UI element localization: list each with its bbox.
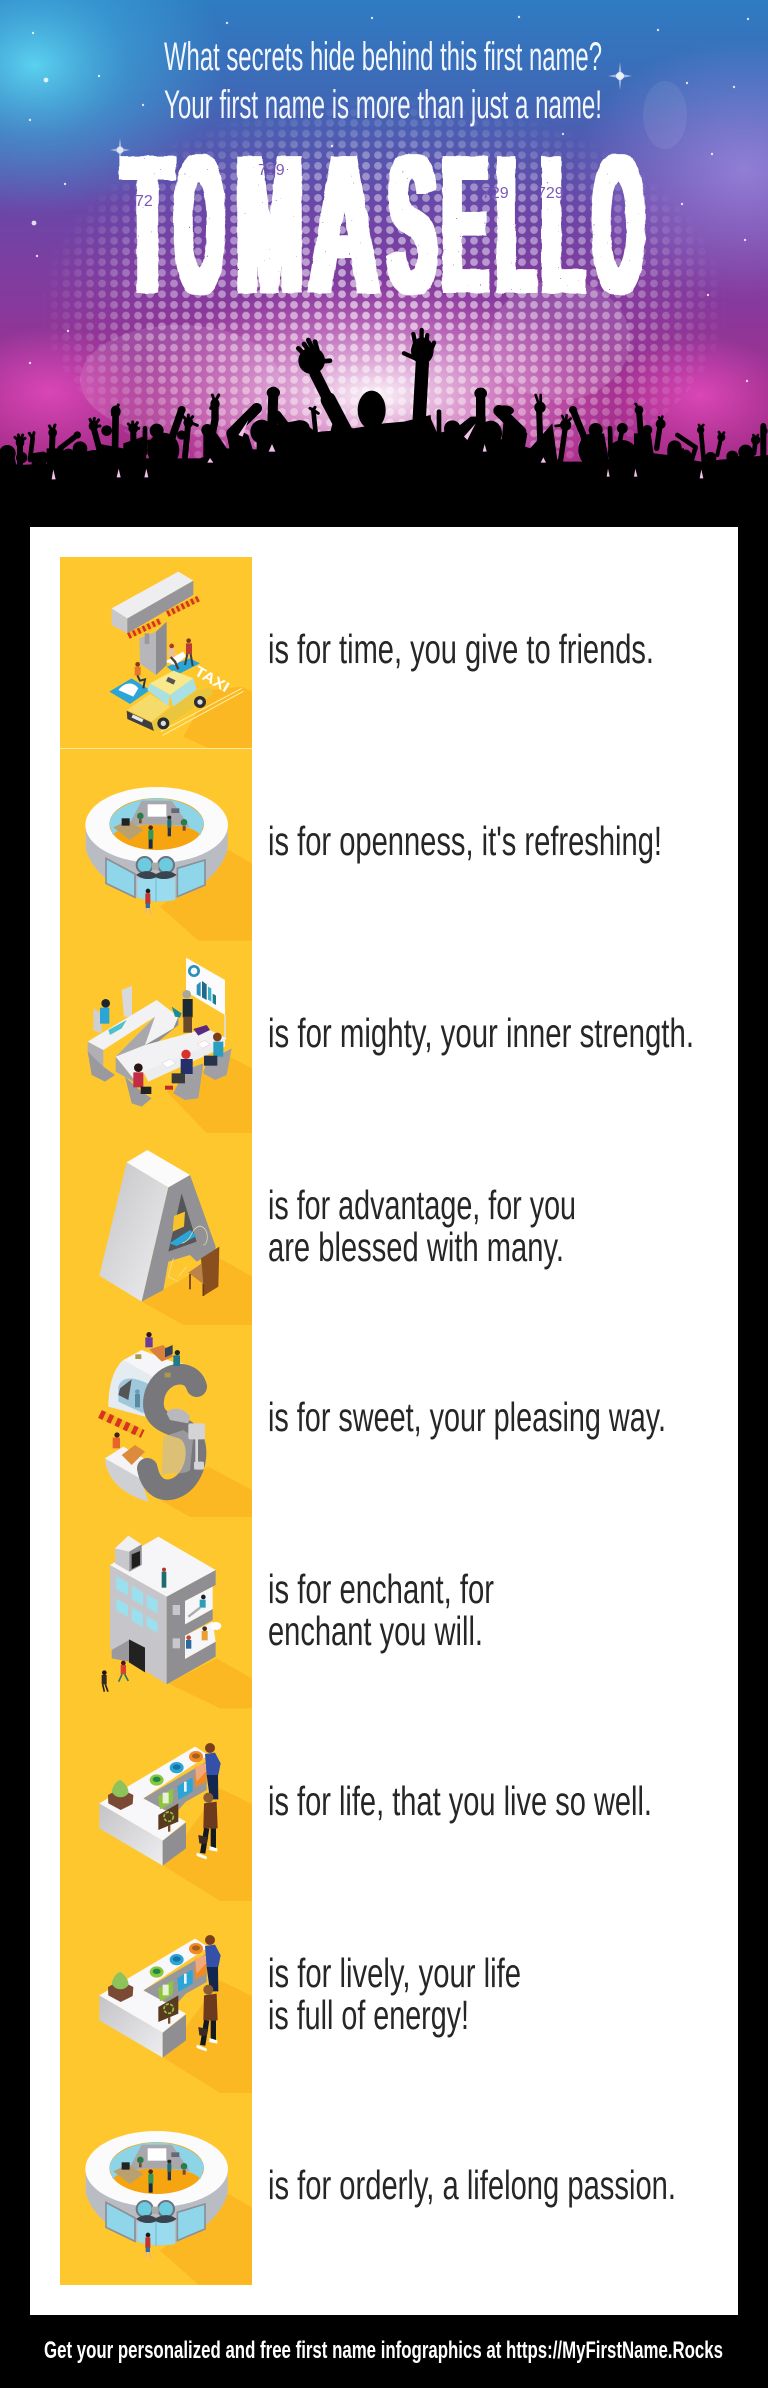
- icon: A desk sculpture: [60, 1133, 252, 1325]
- text: E lines: [268, 1566, 494, 1654]
- name title: 72: [135, 193, 153, 210]
- text: E lines: enchant you will.: [268, 1608, 483, 1654]
- row: S for sweet: [60, 1325, 666, 1517]
- stage background lights: [0, 0, 768, 510]
- icon: T taxi stand: TAXI: [191, 664, 232, 696]
- name title: E: [443, 115, 487, 334]
- icon: L recycling bar repeat: [60, 1901, 252, 2093]
- row: O for openness: [60, 749, 662, 941]
- text: A lines: is for advantage, for you: [268, 1182, 576, 1228]
- name title: 729: [258, 162, 285, 179]
- row: T for time: [60, 557, 654, 750]
- row: A for advantage: [60, 1133, 576, 1325]
- name title: A: [310, 115, 378, 334]
- icon: E building: [60, 1517, 252, 1709]
- text: E lines: is for enchant, for: [268, 1566, 494, 1612]
- name title: S: [389, 115, 435, 334]
- sparkle stars: [29, 16, 749, 382]
- name title: T: [123, 115, 172, 334]
- crowd silhouette: [0, 330, 768, 527]
- icon: L recycling bar: [60, 1709, 252, 1901]
- name title: 729: [537, 185, 564, 202]
- icon: O optician store: [60, 749, 252, 941]
- row: E for enchant: [60, 1517, 494, 1709]
- name title: O: [176, 115, 223, 334]
- text: lively lines: is for lively, your life: [268, 1950, 521, 1996]
- text: A lines: are blessed with many.: [268, 1224, 564, 1270]
- text: lively lines: [268, 1950, 521, 2038]
- icon: T taxi stand: [60, 557, 252, 750]
- text: A lines: [268, 1182, 576, 1270]
- row: M for mighty: [60, 941, 694, 1133]
- icon: O optician store repeat: [60, 2093, 252, 2285]
- name title: L: [542, 115, 583, 334]
- name title: L: [498, 115, 534, 334]
- white content panel: [30, 527, 738, 2315]
- header banner: [0, 0, 768, 527]
- name title: M: [237, 115, 302, 334]
- name title: 729: [482, 185, 509, 202]
- text: lively lines: is full of energy!: [268, 1992, 469, 2038]
- row: L for lively: [60, 1901, 521, 2093]
- icon: M meeting table: [60, 941, 252, 1133]
- row: L for life: [60, 1709, 652, 1901]
- icon: S office sculpture: [60, 1325, 252, 1517]
- name title: [123, 115, 643, 334]
- header banner: O: [594, 115, 643, 334]
- tagline: [164, 35, 602, 127]
- row: O for orderly: [60, 2093, 676, 2285]
